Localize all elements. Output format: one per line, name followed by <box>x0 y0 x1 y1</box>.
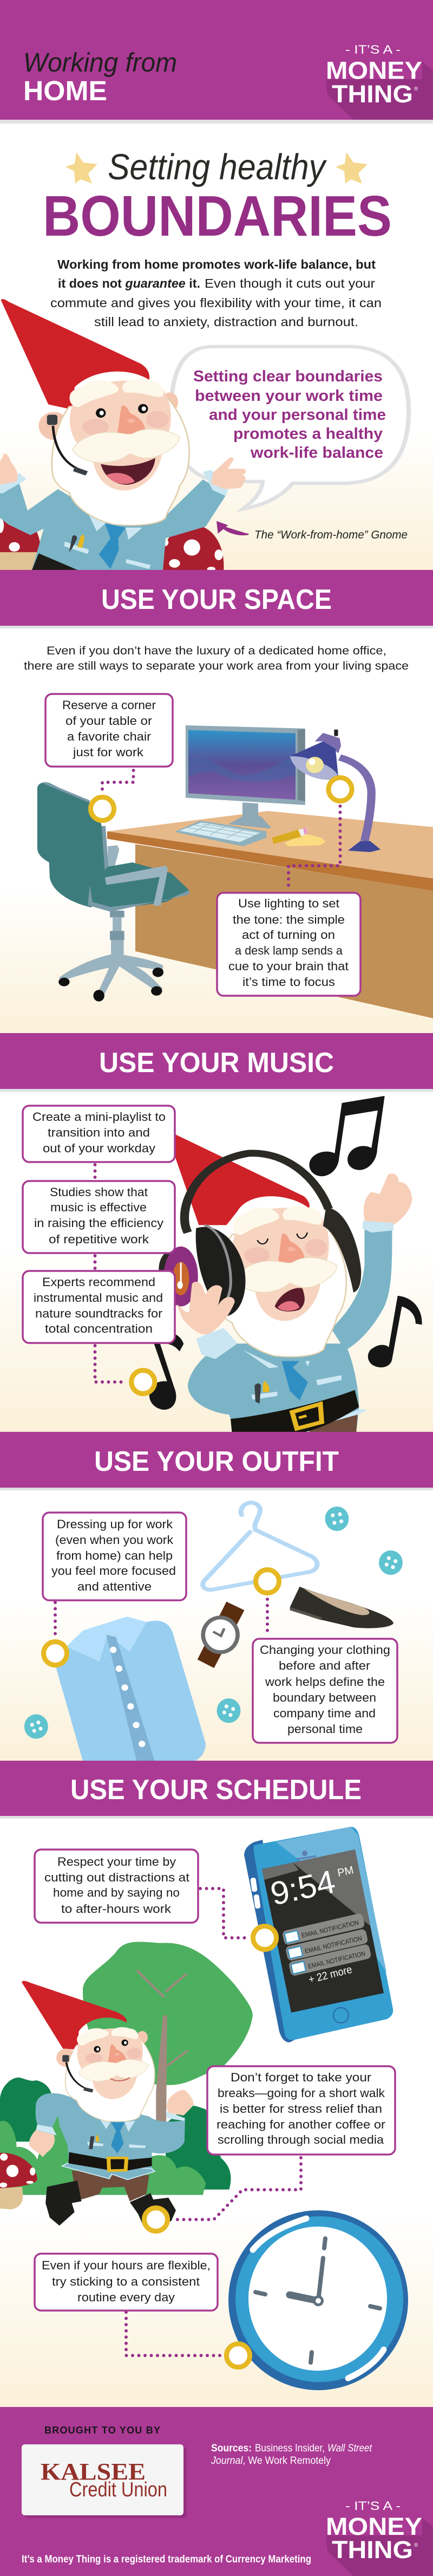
callout: respect your time <box>35 1850 198 1923</box>
speech bubble text: work-life balance <box>250 444 383 462</box>
callout: dressing up: from home) can help <box>56 1549 173 1562</box>
connector: consistent routine to clock <box>126 2312 250 2367</box>
eyes <box>96 404 148 418</box>
footer logo: ® <box>414 2542 418 2548</box>
section header: use your outfit <box>0 1432 433 1490</box>
callout: dressing up <box>43 1513 186 1600</box>
callout: take your breaks: reaching for another coffee or <box>216 2118 385 2131</box>
headset <box>47 415 88 476</box>
head <box>52 379 189 525</box>
highlights <box>253 2218 384 2378</box>
bushes <box>0 2078 231 2195</box>
singing mouth <box>275 1288 305 1312</box>
section header: covering shirt bottom: USE YOUR SCHEDULE <box>70 1774 362 1806</box>
connector: breaks to walking gnome <box>144 2158 301 2231</box>
callout: lighting: act of turning on <box>242 928 335 942</box>
music note, lower left <box>149 1332 183 1410</box>
callout: reserve a corner: of your table or <box>65 714 152 728</box>
callout: experts: Experts recommend <box>42 1275 155 1289</box>
tie <box>99 523 126 569</box>
notifications: EMAIL NOTIFICATION <box>307 1950 366 1970</box>
connector: respect your time <box>200 1889 276 1949</box>
hat <box>1 299 149 410</box>
illustration: work-from-home gnome with speech bubble <box>0 299 409 572</box>
callout: take your breaks <box>207 2066 395 2155</box>
headphones <box>159 1153 361 1316</box>
callout: studies: in raising the efficiency <box>34 1216 163 1230</box>
notifications <box>282 1913 372 1976</box>
callout: consistent routine: try sticking to a consistent <box>52 2275 200 2288</box>
callout: mini-playlist <box>23 1106 175 1162</box>
callout: reserve a corner: just for work <box>73 745 144 759</box>
connector: hanger to changing clothes <box>255 1570 279 1635</box>
callout: lighting: it’s time to focus <box>242 975 335 989</box>
hand holding headphones <box>177 1282 235 1334</box>
hat <box>166 1130 310 1225</box>
raised hand <box>364 1173 412 1225</box>
callout: experts: nature soundtracks for <box>35 1307 162 1320</box>
header title: Working from <box>23 48 177 77</box>
section header: use your space: USE YOUR SPACE <box>101 584 332 615</box>
speech bubble text: Setting clear boundaries <box>193 368 383 385</box>
head <box>216 1206 346 1357</box>
callout: respect your time: home and by saying no <box>53 1886 180 1899</box>
connector: chair <box>91 770 133 820</box>
callout: lighting: the tone: the simple <box>233 913 345 926</box>
callout: studies: music is effective <box>50 1201 147 1214</box>
notifications: EMAIL NOTIFICATION <box>304 1935 363 1955</box>
callout: dressing up: you feel more focused <box>51 1564 176 1578</box>
logo: It's a Money Thing: ® <box>414 86 418 92</box>
icon: left star <box>65 152 97 184</box>
clock time: 9:54 <box>267 1863 338 1912</box>
intro paragraph: commute and gives you flexibility with your time, it can <box>50 296 382 310</box>
watch <box>198 1601 245 1668</box>
section header: use your space <box>0 570 433 628</box>
speech bubble text <box>193 368 386 462</box>
tree canopy <box>83 1942 253 2085</box>
header banner <box>0 0 433 124</box>
speech bubble <box>171 347 409 509</box>
connector: dressing up to shirt <box>43 1602 67 1665</box>
header title: HOME <box>23 75 107 106</box>
callout: consistent routine <box>35 2254 218 2311</box>
raised arm <box>331 1228 392 1351</box>
hat <box>22 1981 127 2049</box>
speech bubble text: between your work time <box>195 387 383 405</box>
phone body <box>244 1840 295 2042</box>
space intro text: there are still ways to separate your work area from your living space <box>24 660 409 672</box>
title block <box>43 147 392 248</box>
collar <box>88 514 106 531</box>
footer logo <box>326 2499 433 2576</box>
chair <box>37 782 189 1002</box>
paper and pencil <box>272 828 325 846</box>
hanger <box>203 1503 317 1590</box>
hands <box>211 457 246 489</box>
mushroom <box>0 2153 37 2209</box>
shirt with belt <box>188 1344 368 1433</box>
illustration: gnome with headphones and music notes <box>149 1096 422 1433</box>
callout: changing clothes: personal time <box>287 1722 363 1736</box>
shirt <box>0 479 226 570</box>
callout: respect your time: cutting out distractions at <box>44 1871 189 1884</box>
dress shirt <box>55 1617 206 1761</box>
lamp <box>290 730 380 852</box>
side buttons <box>250 1877 261 1909</box>
sponsor logo card: Credit Union <box>69 2478 167 2501</box>
callout: changing clothes <box>253 1639 397 1743</box>
callout: changing clothes: before and after <box>279 1659 370 1672</box>
left cuff <box>196 1328 238 1359</box>
subtitle: Setting healthy <box>108 147 327 187</box>
keyboard <box>175 821 266 846</box>
sources <box>211 2443 372 2467</box>
mouth <box>101 458 155 485</box>
callout: studies: of repetitive work <box>49 1232 149 1246</box>
sources: Wall Street <box>327 2443 372 2454</box>
callout: consistent routine: Even if your hours are flexible, <box>42 2259 211 2272</box>
footer panel <box>0 2407 433 2576</box>
sponsor logo card <box>22 2444 187 2518</box>
callout: changing clothes: work helps define the <box>265 1675 385 1689</box>
ears <box>38 412 69 440</box>
sources: Journal, We Work Remotely <box>211 2455 331 2467</box>
intro paragraph: Even though it cuts out your <box>205 276 375 290</box>
icon: right star <box>336 152 368 184</box>
callout: dressing up: (even when you work <box>55 1533 174 1547</box>
illustration: walking gnome with tree and bushes <box>0 1942 253 2227</box>
callout: respect your time: Respect your time by <box>57 1855 176 1868</box>
callout: consistent routine: routine every day <box>77 2291 175 2304</box>
belt <box>32 553 78 570</box>
connector: lamp <box>288 778 352 891</box>
illustration: outfit items <box>24 1503 403 1761</box>
closed eyes <box>258 1232 307 1244</box>
belt and hem <box>62 2152 155 2179</box>
section header: covering shirt bottom <box>0 1761 433 1819</box>
callout: take your breaks: breaks—going for a short walk <box>218 2086 385 2100</box>
cuff <box>362 1221 393 1232</box>
callout: lighting: Use lighting to set <box>238 897 339 910</box>
main title: BOUNDARIES <box>43 184 392 248</box>
tree trunk <box>137 1970 188 2124</box>
callout: reserve a corner: a favorite chair <box>67 730 151 743</box>
section header: use your outfit: USE YOUR OUTFIT <box>94 1446 339 1477</box>
callout: respect your time: to after-hours work <box>61 1902 172 1916</box>
logo: It's a Money Thing <box>326 43 433 120</box>
desk <box>107 811 433 1025</box>
brought to you by: BROUGHT TO YOU BY <box>44 2425 160 2436</box>
shirt <box>36 2093 185 2169</box>
clock hands <box>290 2258 323 2301</box>
logo: It's a Money Thing: MONEY <box>326 56 422 85</box>
illustration: desk setup <box>37 725 433 1025</box>
mushrooms <box>0 501 224 572</box>
callout: experts: instrumental music and <box>34 1291 163 1305</box>
illustration: phone with notifications <box>244 1827 393 2042</box>
callout: take your breaks: scrolling through social media <box>218 2133 384 2146</box>
intro paragraph: Working from home promotes work-life balance, but <box>57 257 376 271</box>
pm: PM <box>336 1864 355 1879</box>
section header: use your music <box>0 1033 433 1092</box>
callout: lighting <box>217 893 360 996</box>
sources: Sources: <box>211 2443 252 2454</box>
speech bubble text: and your personal time <box>209 406 386 424</box>
cuffs <box>0 473 26 494</box>
logo: It's a Money Thing: - IT’S A - <box>345 43 401 56</box>
callout: reserve a corner: Reserve a corner <box>62 698 156 712</box>
callout: lighting: cue to your brain that <box>228 959 349 973</box>
illustration: wall clock <box>228 2210 408 2390</box>
callout: mini-playlist: Create a mini-playlist to <box>32 1110 166 1124</box>
callout: changing clothes: company time and <box>273 1706 376 1720</box>
intro paragraph: it does not guarantee it. <box>58 276 200 290</box>
callout: reserve a corner <box>45 694 173 767</box>
speech bubble text: promotes a healthy <box>233 425 383 443</box>
speaker and camera <box>297 1851 349 2023</box>
headset <box>62 2055 93 2093</box>
callout: dressing up: and attentive <box>77 1580 152 1593</box>
cuffs and hands <box>29 2090 194 2157</box>
music note, lower right <box>368 1296 422 1367</box>
callout: changing clothes: Changing your clothing <box>260 1643 390 1657</box>
pockets with pen and pencil <box>64 534 151 569</box>
callout: mini-playlist: transition into and <box>48 1126 150 1139</box>
collar, pocket and tie <box>87 2117 146 2153</box>
gnome caption: The “Work-from-home” Gnome <box>254 529 408 541</box>
section header: use your music: USE YOUR MUSIC <box>99 1047 334 1079</box>
footer logo: THING <box>332 2536 413 2564</box>
arrow to gnome <box>218 522 248 535</box>
callout: experts: total concentration <box>45 1322 153 1335</box>
more notifications: + 22 more <box>307 1964 353 1986</box>
callout: take your breaks: is better for stress relief than <box>220 2102 382 2116</box>
callout: lighting: a desk lamp sends a <box>235 944 343 957</box>
callout: mini-playlist: out of your workday <box>43 1141 155 1155</box>
callout: changing clothes: boundary between <box>273 1691 376 1704</box>
shoe <box>290 1587 393 1628</box>
clock ticks <box>255 2238 380 2363</box>
callout: take your breaks: Don’t forget to take your <box>231 2071 371 2084</box>
sponsor logo card: KALSEE <box>41 2458 146 2485</box>
space intro text <box>24 645 409 672</box>
callout: studies: Studies show that <box>50 1185 148 1199</box>
pants and boots <box>45 2171 176 2227</box>
screen <box>262 1850 384 2013</box>
head <box>65 2027 155 2121</box>
buttons <box>24 1507 403 1739</box>
music notes, double note <box>309 1096 385 1176</box>
callout: studies <box>23 1181 175 1253</box>
collar, pocket and tie <box>243 1350 342 1404</box>
space intro text: Even if you don’t have the luxury of a dedicated home office, <box>47 645 386 657</box>
intro paragraph <box>50 257 382 329</box>
eyes and smile <box>94 2040 130 2081</box>
sources: Business Insider, <box>255 2443 325 2454</box>
header title <box>23 48 177 106</box>
connector: music callouts to note <box>95 1165 155 1393</box>
logo: It's a Money Thing: THING <box>332 80 413 108</box>
footer logo: MONEY <box>326 2513 422 2540</box>
monitor <box>186 725 305 828</box>
intro paragraph: still lead to anxiety, distraction and burnout. <box>94 315 358 329</box>
notifications: EMAIL NOTIFICATION <box>301 1919 359 1939</box>
trademark line: It’s a Money Thing is a registered trademark of Currency Marketing <box>22 2554 311 2565</box>
callout: experts <box>23 1271 175 1343</box>
callout: dressing up: Dressing up for work <box>57 1517 173 1531</box>
ears <box>56 2031 148 2067</box>
footer logo: - IT’S A - <box>345 2499 401 2513</box>
glare <box>276 1827 386 1972</box>
